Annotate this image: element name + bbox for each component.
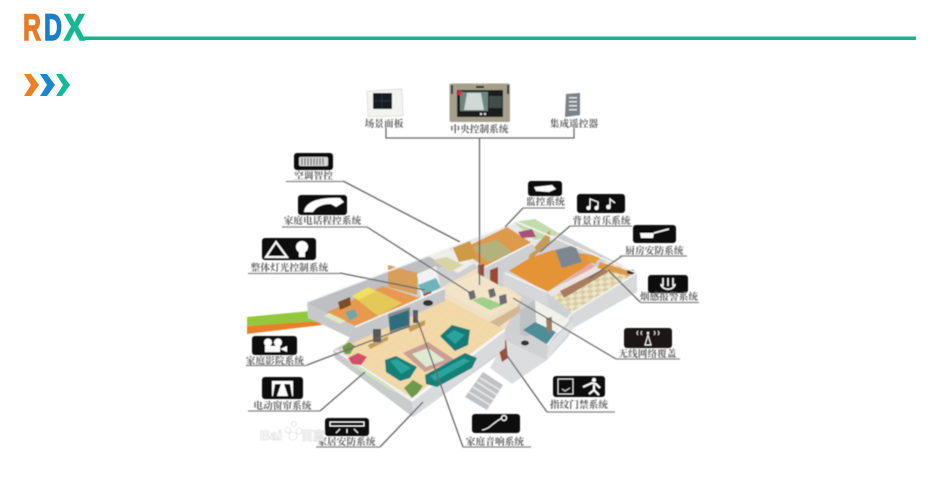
panel: integrated remote: 集成遥控器	[550, 118, 599, 130]
watermark: Baidu	[260, 422, 325, 443]
icon + label: smoke alarm	[639, 275, 699, 303]
icon + label: wireless network	[616, 328, 680, 360]
icon + label: kitchen security	[620, 225, 687, 257]
colored ground strips	[247, 311, 322, 334]
smart home diagram	[246, 84, 699, 448]
house floor plan	[307, 219, 637, 417]
icon + label: surveillance	[523, 181, 566, 208]
header rule	[80, 36, 916, 40]
front walls	[333, 350, 413, 417]
icon + label: background music: 背景音乐系统	[572, 215, 632, 227]
divider walls	[478, 243, 536, 288]
wood panel	[388, 265, 418, 295]
left sofa	[385, 356, 417, 381]
logo: RDX: R	[23, 7, 41, 48]
icon + label: phone	[282, 195, 367, 227]
icon + label: lighting: 整体灯光控制系统	[251, 262, 330, 274]
watermark: Baidu: 百度	[301, 428, 325, 443]
section chevrons	[24, 74, 70, 96]
dining area	[440, 273, 520, 317]
icon + label: air conditioning	[286, 153, 343, 182]
icon + label: surveillance: 监控系统	[526, 196, 566, 208]
icon + label: home theater: 家庭影院系统	[246, 355, 305, 367]
stairs	[465, 372, 503, 410]
rug	[403, 342, 455, 372]
icon + label: home theater	[246, 336, 307, 367]
tv wall	[345, 288, 445, 349]
armchair	[440, 325, 470, 351]
small bath	[417, 266, 441, 298]
living room floor	[340, 296, 505, 398]
logo: RDX	[23, 7, 85, 48]
rear bedroom	[448, 222, 562, 270]
icon + label: wireless network: 无线网络覆盖	[618, 348, 677, 360]
door	[497, 340, 508, 362]
icon + label: lighting	[248, 238, 340, 274]
icon + label: home audio: 家庭音响系统	[466, 436, 525, 448]
silhouette	[307, 222, 637, 417]
wood living room	[505, 250, 602, 292]
porch	[490, 340, 547, 384]
panel: scene panel: 场景面板	[365, 118, 404, 130]
icon + label: home security: 家居安防系统	[317, 436, 377, 448]
watermark: Baidu: Bai	[260, 427, 282, 443]
icon + label: home audio	[463, 414, 531, 448]
rear bath	[520, 300, 537, 338]
panel: integrated remote	[550, 93, 599, 130]
panel: central control system	[450, 84, 510, 136]
panel: scene panel	[365, 89, 404, 130]
logo: RDX: X	[64, 7, 85, 48]
connector lines	[307, 128, 640, 447]
logo: RDX: D	[44, 7, 62, 48]
plants	[404, 380, 423, 398]
long sofa	[425, 353, 477, 387]
icon + label: smoke alarm: 烟感报警系统	[639, 291, 699, 303]
icon + label: motorized curtains: 电动窗帘系统	[253, 400, 313, 412]
icon + label: fingerprint access: 指纹门禁系统	[550, 399, 609, 411]
icon + label: home security	[316, 418, 380, 448]
tv	[388, 307, 410, 334]
bed	[355, 290, 402, 316]
kitchen	[547, 260, 637, 313]
icon + label: fingerprint access	[547, 376, 615, 412]
icon + label: phone: 家庭电话程控系统	[284, 215, 363, 227]
bedroom wing: inner back wall	[307, 250, 443, 314]
outer kitchen wall	[572, 275, 637, 328]
icon + label: kitchen security: 厨房安防系统	[625, 245, 685, 257]
tub room	[428, 248, 476, 273]
dining base floor	[436, 268, 522, 330]
icon + label: background music	[570, 194, 632, 227]
icon + label: motorized curtains	[248, 377, 320, 412]
wall rims	[307, 222, 637, 345]
panel: central control system: 中央控制系统	[450, 124, 510, 136]
icon + label: air conditioning: 空调智控	[294, 170, 333, 182]
